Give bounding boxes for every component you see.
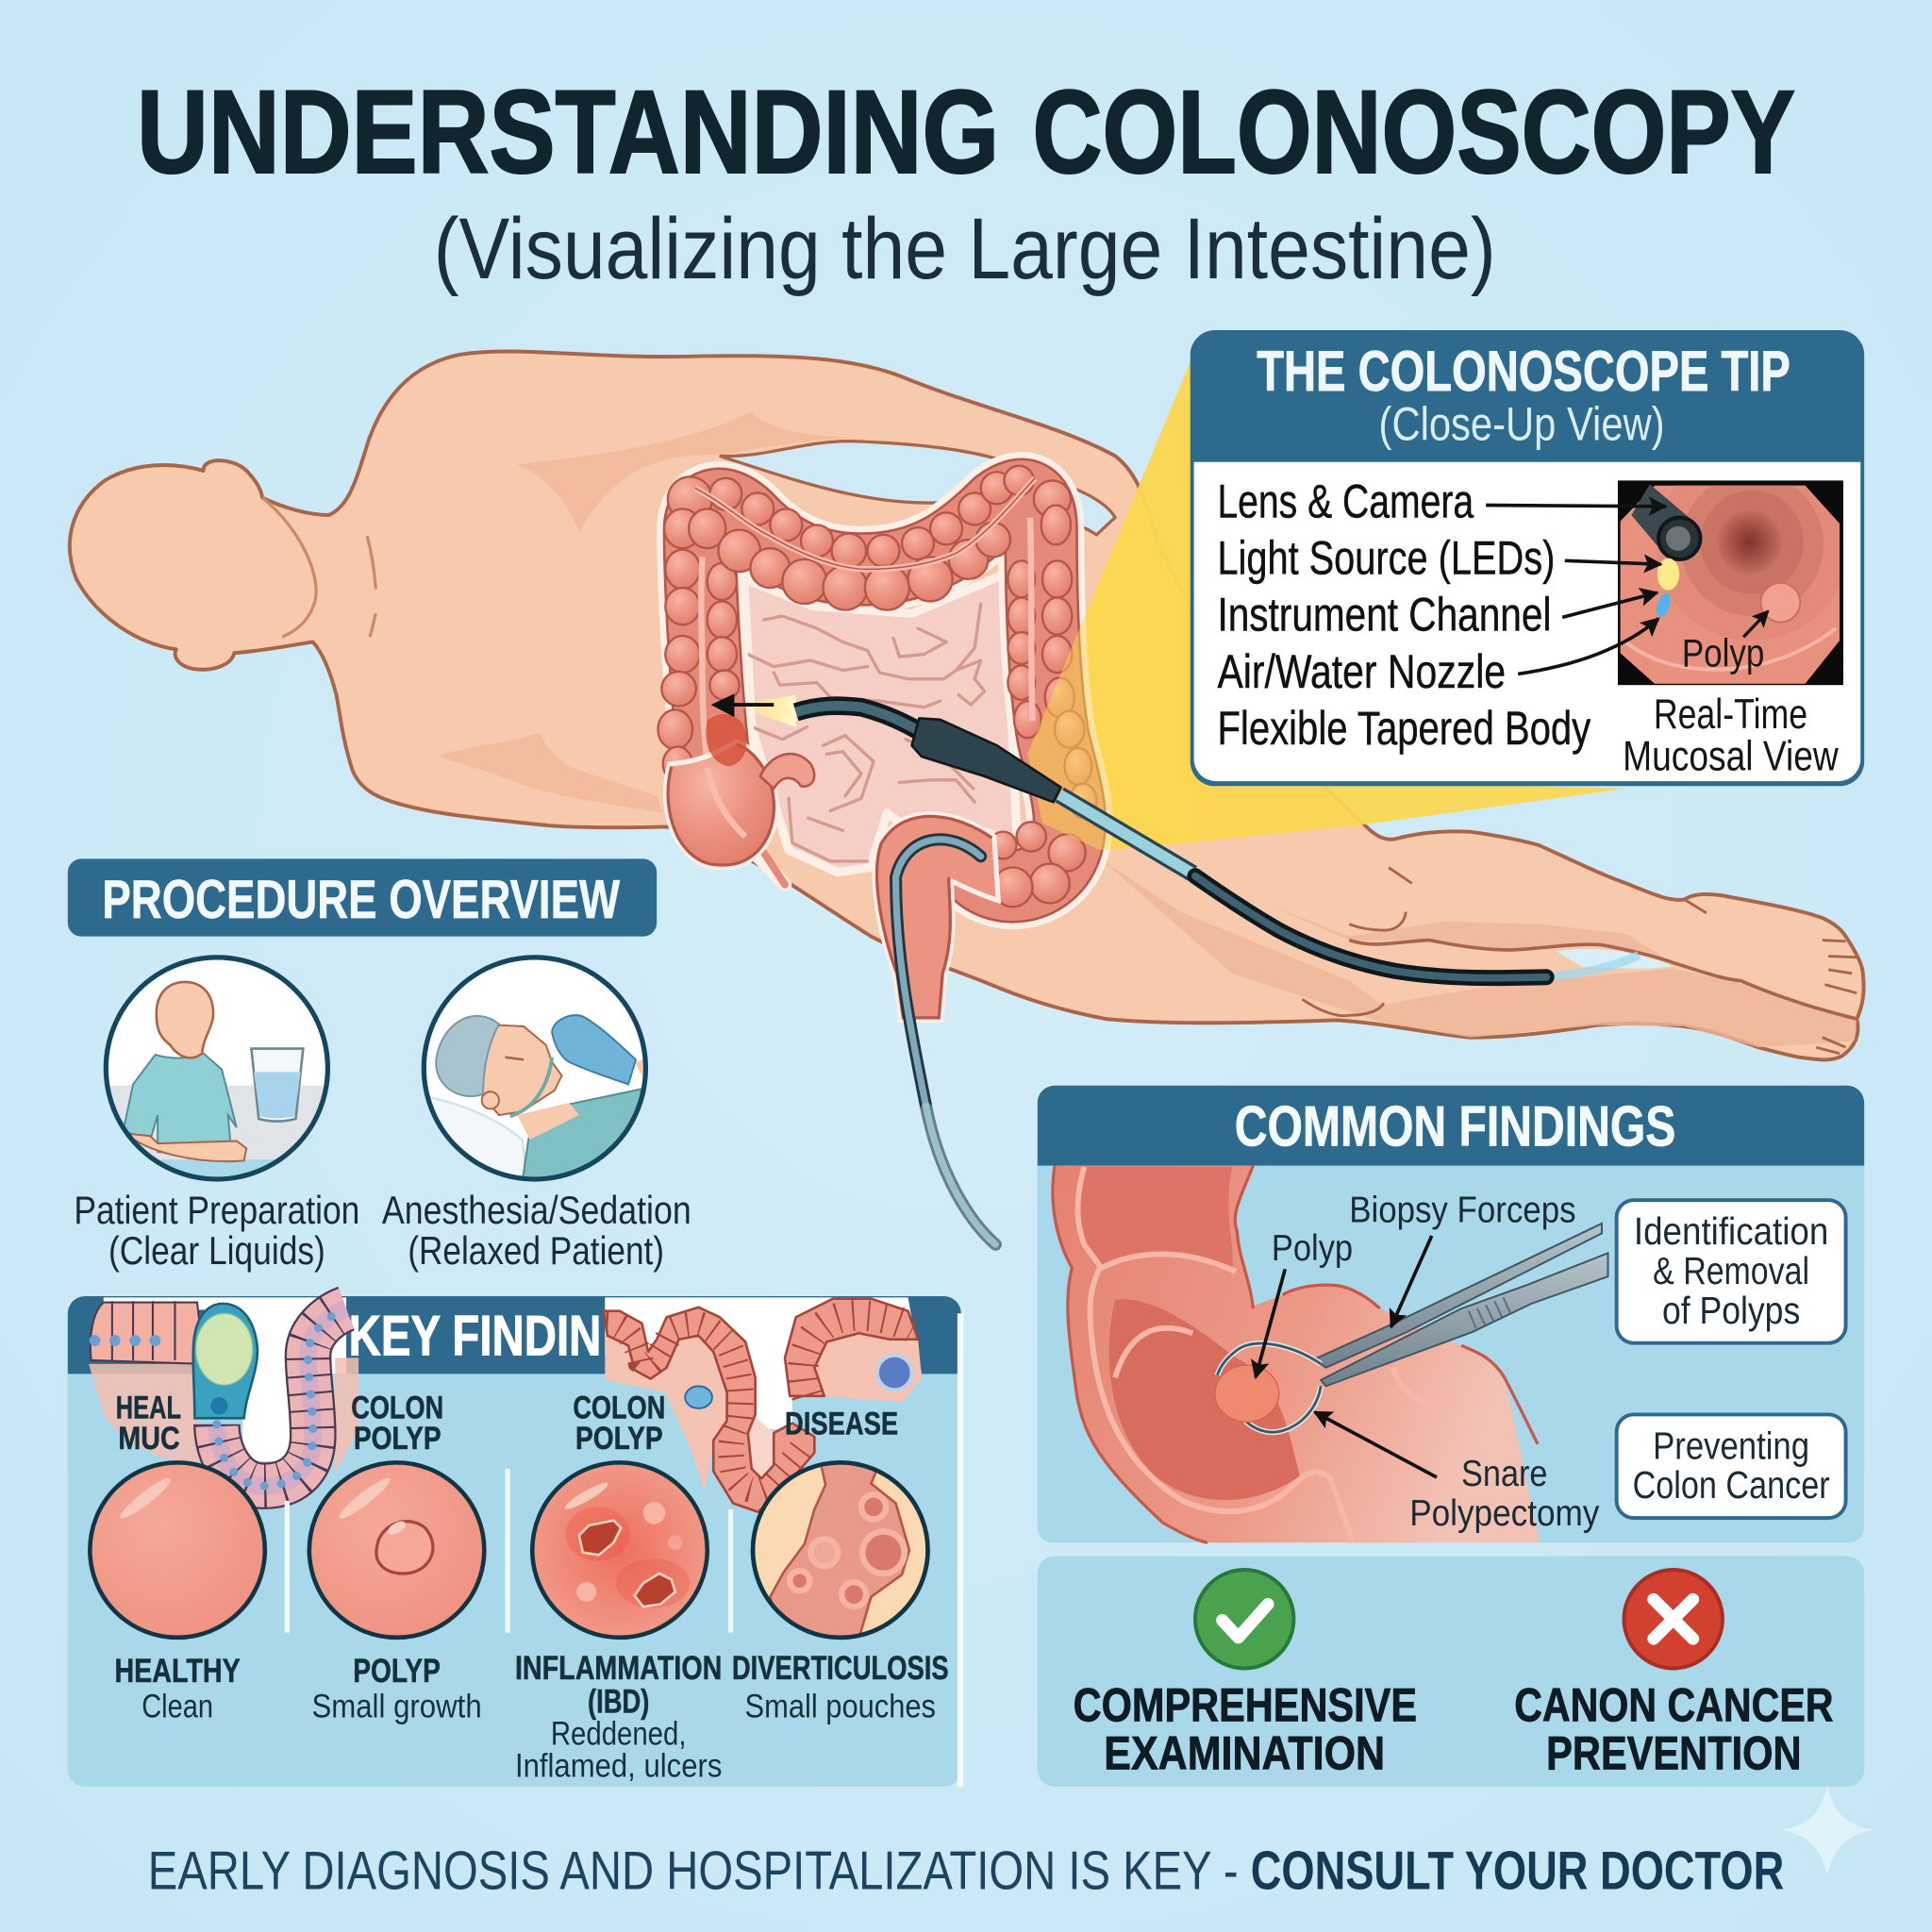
finding captions: DIVERTICULOSIS [732,1650,949,1687]
label: comprehensive examination: EXAMINATION [1104,1727,1385,1780]
dark tube to body [1195,876,1546,978]
panel: colonoscope tip: Mucosal View [1623,733,1840,779]
component labels: Air/Water Nozzle [1217,645,1506,698]
leg shading [1100,858,1857,1047]
label: anesthesia [382,1188,691,1273]
callout: prevention: Colon Cancer [1633,1463,1830,1507]
label: patient preparation [74,1188,359,1273]
colon outline [700,495,1070,886]
heading: KEY FINDIN [349,1305,601,1368]
component labels: Lens & Camera [1217,475,1474,528]
body silhouette [70,352,1864,1059]
colonoscope tube [711,693,1546,1244]
annotations: Biopsy Forceps [1349,1191,1576,1231]
tissue illustration right [604,1299,922,1512]
callout: identification [1617,1200,1846,1343]
annotations: Snare [1461,1454,1547,1494]
label: patient preparation: (Clear Liquids) [108,1228,325,1273]
finding captions: Small growth [311,1689,482,1725]
heading: COMMON FINDINGS [1235,1095,1675,1158]
heading: THE COLONOSCOPE TIP [1257,340,1790,403]
body shading [439,411,860,813]
circle: polyp [309,1462,484,1638]
footer message: EARLY DIAGNOSIS AND HOSPITALIZATION IS KEY - [148,1840,1239,1901]
inserted tube [896,840,995,1244]
dividers [287,1469,731,1633]
finding captions: (IBD) [588,1684,649,1721]
procedure overview heading [68,858,657,937]
label: comprehensive examination: COMPREHENSIVE [1074,1679,1417,1732]
forceps [1315,1224,1602,1368]
knee marks and toes [1303,868,1857,1054]
rectum [877,816,995,1018]
snare loop [1217,1343,1321,1432]
scope tip [1631,484,1699,555]
finding captions: Inflamed, ulcers [515,1747,722,1784]
circle: diverticulosis [753,1462,928,1639]
arrow to lesion [711,693,774,717]
upper labels: HEAL [116,1390,181,1425]
callout: prevention: Preventing [1653,1424,1809,1467]
procedure overview heading: PROCEDURE OVERVIEW [102,870,621,930]
small intestine [744,575,1018,873]
label: comprehensive examination [1074,1679,1417,1780]
annotations: Polyp [1272,1228,1353,1269]
endoscopic view: Polyp [1682,631,1764,675]
subheading: (Close-Up View) [1379,397,1665,450]
colon illustration [658,466,1096,1018]
ileum [760,754,814,789]
title: UNDERSTANDING [137,65,999,198]
finding captions: POLYP [353,1653,441,1690]
haustra [658,466,1096,907]
polyp removal illustration [1053,1166,1607,1542]
upper labels: POLYP [575,1421,663,1457]
component labels [1217,475,1591,755]
light glow [734,695,796,727]
finding captions: Reddened, [551,1715,687,1752]
label: anesthesia: Anesthesia/Sedation [382,1188,691,1232]
label: cancer prevention [1514,1679,1834,1780]
panel: common findings [1038,1086,1864,1542]
cecum [668,744,774,865]
scope tube to tip [796,706,921,732]
annotations: Polypectomy [1409,1493,1600,1534]
leader arrows [1486,506,1666,674]
polyp [1760,583,1800,623]
title [137,65,1795,198]
component labels: Light Source (LEDs) [1217,532,1555,585]
connector [912,718,1061,802]
tissue illustration left [89,1301,358,1486]
footer message: CONSULT YOUR DOCTOR [1251,1840,1784,1901]
icon: patient preparation [98,958,333,1184]
upper labels: POLYP [354,1421,441,1457]
yellow light cone [1027,358,1626,850]
leg divider [1349,941,1857,1019]
white illustration backing [104,1297,922,1461]
panel: key findings [68,1296,963,1787]
gap between legs [1557,949,1672,969]
callout: identification: Identification [1634,1209,1828,1253]
annotations [1272,1191,1600,1534]
finding captions: Small pouches [745,1689,936,1725]
gap between arm and torso [720,441,1115,535]
icon: check [1195,1570,1293,1668]
label: patient preparation: Patient Preparation [74,1188,359,1232]
callout: prevention [1617,1414,1846,1518]
finding captions: Clean [142,1689,213,1725]
finding captions: HEALTHY [114,1653,241,1690]
light glow [1657,558,1679,591]
colon contour lines [1053,1166,1538,1542]
cone tint over colon [1027,363,1195,850]
appendix [758,857,785,885]
callout: identification: of Polyps [1662,1289,1800,1332]
icon: anesthesia [424,958,665,1185]
subtitle: (Visualizing the Large Intestine) [434,201,1496,297]
patient body illustration [70,352,1864,1059]
label: cancer prevention: PREVENTION [1546,1727,1802,1780]
component labels: Instrument Channel [1217,589,1551,641]
polyp [1215,1365,1279,1422]
panel: outcomes [1038,1557,1864,1787]
label: cancer prevention: CANON CANCER [1514,1679,1834,1732]
circle: healthy mucosa [90,1462,265,1638]
lesion in colon [706,714,746,766]
circle: inflammation [532,1462,708,1638]
upper labels: COLON [573,1390,665,1425]
finding captions: INFLAMMATION [515,1650,722,1687]
endoscopic view [1617,480,1843,685]
upper labels [116,1390,898,1457]
upper labels: DISEASE [785,1406,898,1441]
component labels: Flexible Tapered Body [1217,702,1591,755]
teal segment [1059,794,1192,874]
taenia bands [695,478,1035,837]
real-time caption: Real-Time [1654,691,1807,738]
label: anesthesia: (Relaxed Patient) [408,1228,664,1273]
upper labels: MUC [118,1421,180,1457]
finding captions [114,1650,949,1784]
icon: sparkle [1782,1784,1873,1875]
panel: colonoscope tip [1191,330,1864,786]
callout: identification: & Removal [1653,1249,1809,1292]
icon: cross [1624,1570,1723,1668]
upper labels: COLON [351,1390,443,1425]
